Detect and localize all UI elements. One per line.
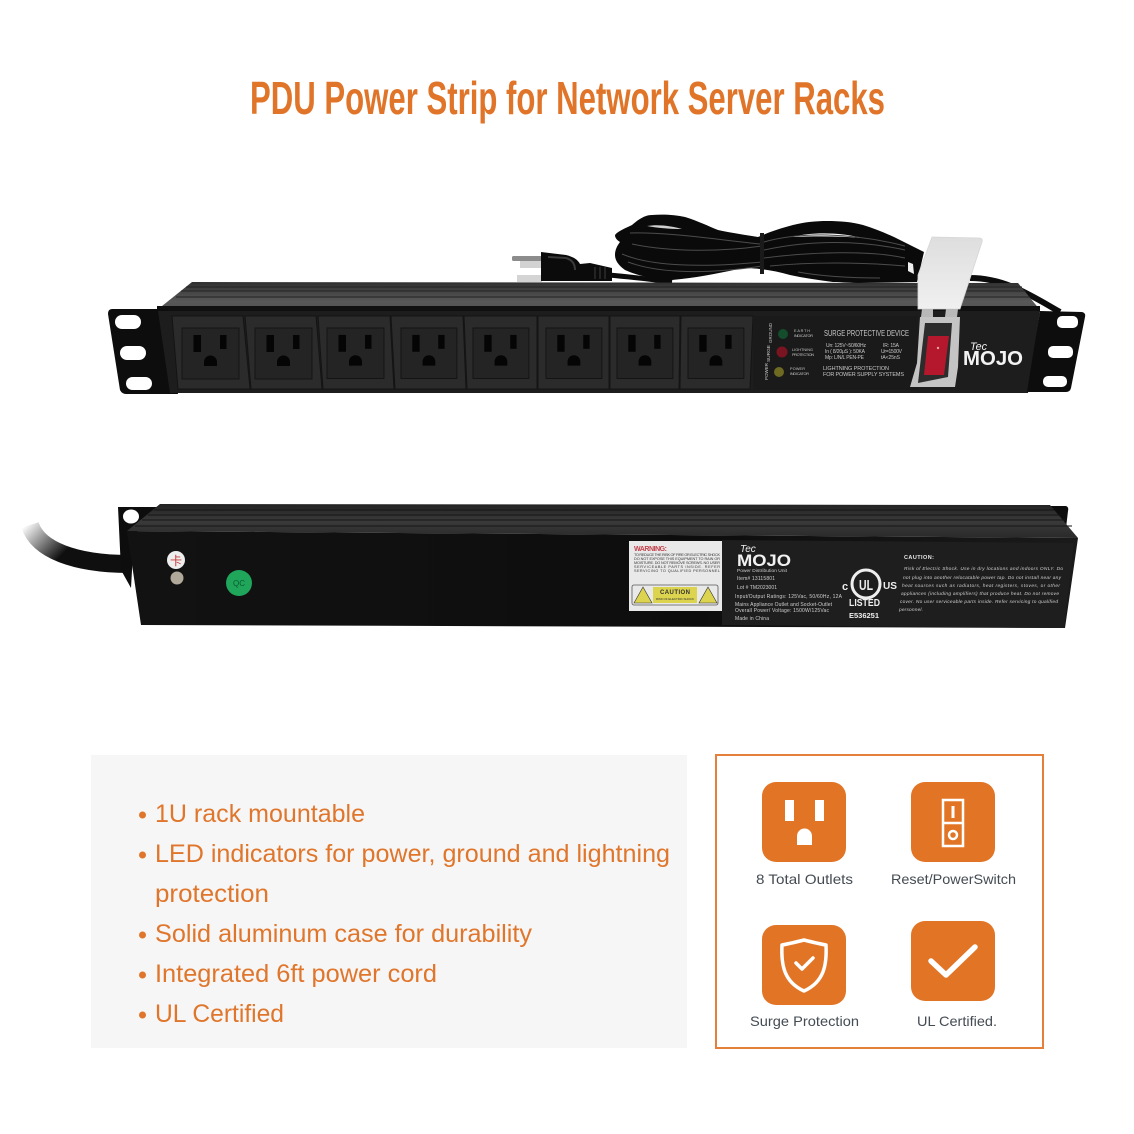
rating panel with logo, UL mark and caution text: Made in China: [735, 616, 769, 622]
feature: LED indicators: protection: [155, 880, 269, 908]
panel: features list: [91, 755, 687, 1048]
rating panel with logo, UL mark and caution text: MOJO: [737, 551, 791, 570]
surge panel with LED indicators: INDICATOR: [790, 372, 809, 376]
warning label: RISK OF ELECTRIC SHOCK: [656, 597, 694, 601]
feature: power cord: Integrated 6ft power cord: [155, 960, 437, 988]
sticker and button: [167, 551, 185, 584]
warning label: TO REDUCE THE RISK OF FIRE OR ELECTRIC SHOCK: [634, 553, 720, 557]
surge panel with LED indicators: SURGE: [766, 345, 771, 362]
left rear ear: [118, 507, 158, 588]
surge panel with LED indicators: GROUND: [768, 322, 773, 343]
product photo: back of power strip: [30, 504, 1078, 628]
icon: shield: [762, 925, 846, 1005]
label: 8 total outlets: 8 Total Outlets: [756, 871, 853, 887]
green QC sticker: [226, 570, 252, 596]
label: surge protection: Surge Protection: [750, 1013, 859, 1029]
surge panel with LED indicators: tA<25nS: [881, 355, 901, 361]
eight outlets: [182, 328, 744, 379]
warning label: MOISTURE. DO NOT REMOVE SCREWS. NO USER: [634, 561, 720, 565]
rocker switch with clear cover: [910, 237, 982, 387]
surge panel with LED indicators: In ( 8/20μS ): 50KA: [825, 349, 866, 355]
green QC sticker: QC: [233, 579, 245, 588]
power plug: [512, 252, 612, 282]
warning label: CAUTION: [660, 590, 690, 596]
rating panel with logo, UL mark and caution text: CAUTION:: [904, 555, 934, 561]
rating panel with logo, UL mark and caution text: Input/Output Ratings: 125Vac, 50/60Hz, 12A: [735, 594, 843, 600]
rating panel with logo, UL mark and caution text: not plug into another relocatable power tap. Do not install near any: [903, 575, 1062, 581]
rating panel with logo, UL mark and caution text: cover. No user serviceable parts inside. Refer servicing to qualified: [900, 599, 1058, 605]
feature: LED indicators: LED indicators for power, ground and lightning: [155, 840, 670, 868]
warning label: WARNING:: [634, 546, 667, 553]
rating panel with logo, UL mark and caution text: Tec: [740, 544, 756, 555]
rating panel with logo, UL mark and caution text: appliances (including amplifiers) that produce heat. Do not remove: [901, 591, 1059, 597]
surge panel with LED indicators: FOR POWER SUPPLY SYSTEMS: [823, 372, 904, 378]
rating panel with logo, UL mark and caution text: UL: [859, 577, 873, 594]
surge panel with LED indicators: SURGE PROTECTIVE DEVICE: [824, 329, 909, 338]
rating panel with logo, UL mark and caution text: Mains Appliance Outlet and Socket-Outlet: [735, 602, 833, 608]
warning label: DO NOT EXPOSE THIS EQUIPMENT TO RAIN OR: [634, 557, 720, 561]
front faceplate: [158, 311, 1040, 393]
surge panel with LED indicators: POWER: [790, 367, 805, 371]
surge panel with LED indicators: [753, 316, 918, 390]
surge panel with LED indicators: POWER: [764, 362, 769, 380]
surge panel with LED indicators: Mp: L/N/L PEN-PE: [825, 355, 865, 361]
Tec Mojo logo on front: MOJO: [963, 347, 1023, 370]
feature: LED indicators: [139, 840, 670, 908]
feature: aluminum case: Solid aluminum case for durability: [155, 920, 533, 948]
surge panel with LED indicators: IR: 15A: [883, 343, 900, 349]
icon: outlet: [762, 782, 846, 862]
surge panel with LED indicators: LIGHTNING PROTECTION: [823, 366, 889, 372]
right rear ear: [1030, 506, 1068, 528]
power cord: [30, 525, 130, 564]
right rack ear: [1027, 311, 1085, 392]
feature: rack mountable: 1U rack mountable: [155, 800, 365, 828]
rating panel with logo, UL mark and caution text: Risk of Electric Shock. Use in dry locations and indoors ONLY. Do: [904, 566, 1063, 572]
rating panel with logo, UL mark and caution text: Power Distribution Unit: [737, 568, 788, 574]
product photo: front of power strip: [108, 215, 1085, 394]
power cord coil: [608, 215, 924, 283]
rating panel with logo, UL mark and caution text: Item# 13115801: [737, 576, 775, 582]
rating panel with logo, UL mark and caution text: LISTED: [849, 598, 880, 609]
surge panel with LED indicators: LIGHTNING: [792, 348, 813, 352]
surge panel with LED indicators: EARTH: [794, 329, 810, 333]
sticker and button: 卡: [170, 554, 182, 568]
rating panel with logo, UL mark and caution text: heat sources such as radiators, heat registers, stoves, or other: [902, 583, 1060, 589]
rating panel with logo, UL mark and caution text: Overall Power/ Voltage: 1500W/125Vac: [735, 608, 830, 614]
rating panel with logo, UL mark and caution text: [722, 540, 1074, 628]
surge panel with LED indicators: Un: 125V~50/60Hz: [826, 343, 866, 349]
warning label: SERVICING TO QUALIFIED PERSONNEL: [634, 569, 720, 573]
surge panel with LED indicators: INDICATOR: [794, 334, 813, 338]
Tec Mojo logo on front: Tec: [970, 341, 987, 353]
surge panel with LED indicators: Ur=1500V: [881, 349, 903, 355]
rating panel with logo, UL mark and caution text: US: [883, 581, 897, 592]
rear face: [127, 531, 1078, 628]
rating panel with logo, UL mark and caution text: Lot # TM2023001: [737, 585, 777, 591]
label: reset power switch: Reset/PowerSwitch: [891, 871, 1016, 887]
icon: power switch: [911, 782, 995, 862]
panel: icon features: [716, 755, 1043, 1048]
icon: check mark: [911, 921, 995, 1001]
feature: UL certified: UL Certified: [155, 1000, 284, 1028]
left rack ear: [108, 309, 178, 394]
top face of chassis: [157, 282, 1040, 312]
top face: [127, 504, 1078, 538]
rating panel with logo, UL mark and caution text: E536251: [849, 611, 879, 620]
rear cord behind strip: [970, 278, 1060, 312]
rating panel with logo, UL mark and caution text: c: [842, 581, 848, 593]
warning label: [629, 541, 724, 611]
rating panel with logo, UL mark and caution text: personnel.: [898, 607, 923, 613]
label: UL certified: UL Certified.: [917, 1013, 997, 1029]
surge panel with LED indicators: PROTECTION: [792, 353, 814, 357]
warning label: SERVICEABLE PARTS INSIDE. REFER: [634, 565, 720, 569]
